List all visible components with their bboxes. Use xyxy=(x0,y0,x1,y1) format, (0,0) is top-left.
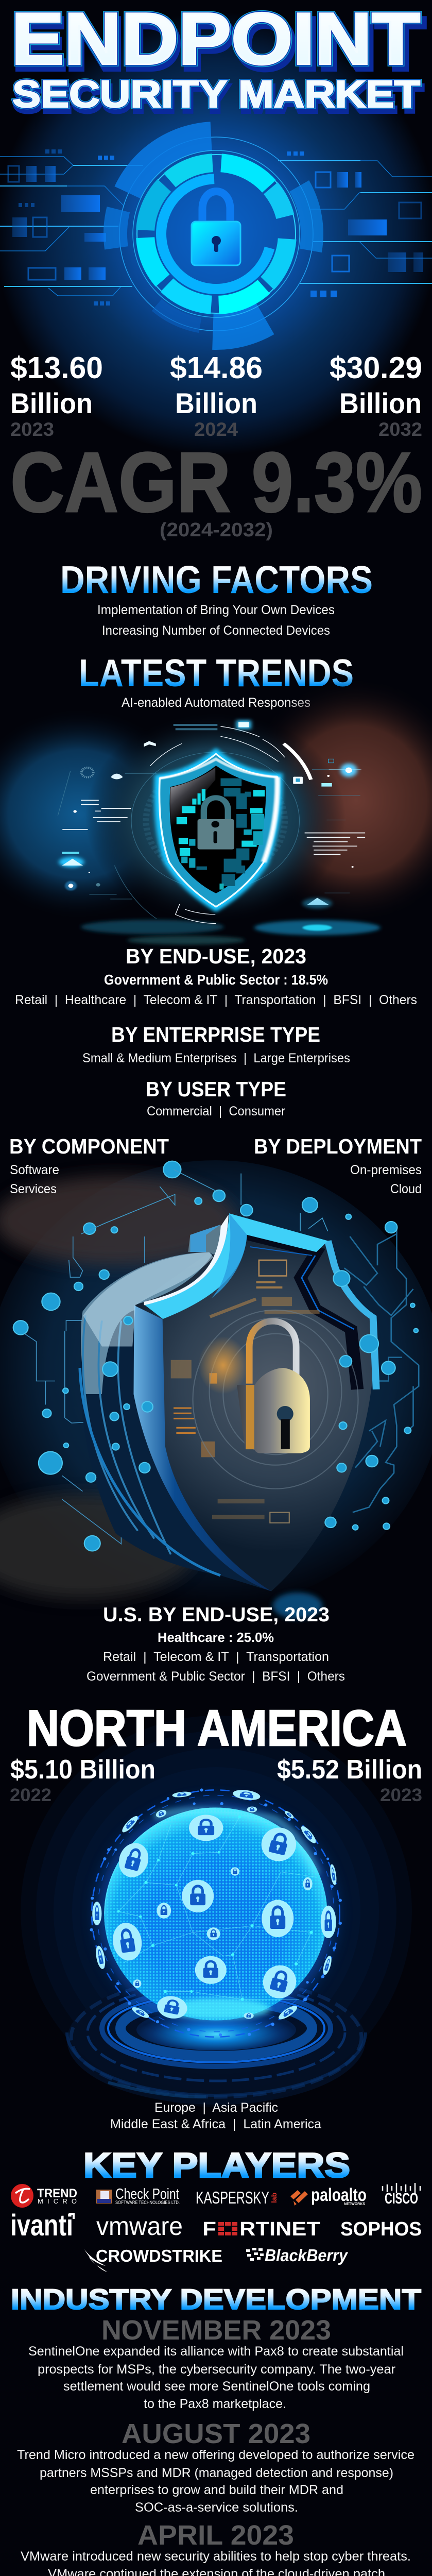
logo: Kaspersky: lab xyxy=(270,2193,278,2203)
north america xyxy=(10,1700,422,1805)
development: April 2023: VMware introduced new security abilities to help stop cyber threats. xyxy=(21,2549,411,2564)
development: April 2023: APRIL 2023 xyxy=(137,2520,294,2551)
key players heading: KEY PLAYERS xyxy=(83,2146,350,2185)
circuit traces xyxy=(344,1229,419,1513)
title: ENDPOINT xyxy=(11,0,420,80)
market size stat 2023 xyxy=(10,351,103,440)
logo: Trend Micro xyxy=(11,2184,77,2208)
latest trends xyxy=(79,651,354,710)
glowing shield illustration xyxy=(0,676,432,945)
by end-use 2023 xyxy=(15,944,417,1007)
development: April 2023 xyxy=(21,2520,411,2576)
small glowing icons xyxy=(59,720,361,908)
by enterprise type: BY ENTERPRISE TYPE xyxy=(111,1023,320,1046)
other regions: Europe | Asia Pacific xyxy=(154,2100,278,2115)
logo: Palo Alto Networks: paloalto xyxy=(311,2185,367,2205)
market size stat 2023: 2023 xyxy=(10,419,54,440)
by component: BY COMPONENT xyxy=(9,1134,169,1158)
north america: 2023 xyxy=(380,1785,422,1805)
north america: $5.52 Billion xyxy=(277,1755,422,1785)
U.S. by end-use: Retail | Telecom & IT | Transportation xyxy=(103,1650,329,1664)
driving factors: Increasing Number of Connected Devices xyxy=(102,623,330,638)
orange glyph details on shield xyxy=(171,1260,320,1523)
U.S. by end-use xyxy=(87,1604,345,1684)
other regions xyxy=(110,2100,321,2131)
by enterprise type: Small & Medium Enterprises | Large Enterprises xyxy=(82,1051,350,1065)
title: SECURITY MARKET xyxy=(14,77,423,120)
development: November 2023: prospects for MSPs, the cybersecurity company. The two-year xyxy=(38,2362,395,2377)
by user type: Commercial | Consumer xyxy=(147,1104,285,1118)
by end-use 2023: Retail | Healthcare | Telecom & IT | Transportation | BFSI | Others xyxy=(15,993,417,1007)
market size stat 2024 xyxy=(170,351,263,440)
development: November 2023: SentinelOne expanded its alliance with Pax8 to create substantial xyxy=(28,2344,404,2359)
market size stat 2024: 2024 xyxy=(194,419,238,440)
globe illustration with locks xyxy=(90,1788,342,2037)
latest trends: AI-enabled Automated Responses xyxy=(122,696,310,710)
U.S. by end-use: U.S. BY END-USE, 2023 xyxy=(103,1604,330,1626)
latest trends: LATEST TRENDS xyxy=(79,651,354,694)
development: August 2023: enterprises to grow and build their MDR and xyxy=(90,2483,343,2497)
title xyxy=(11,0,425,120)
driving factors: Implementation of Bring Your Own Devices xyxy=(97,603,335,617)
logo: Trend Micro: TREND xyxy=(37,2187,77,2200)
title: SECURITY MARKET xyxy=(12,73,420,115)
logo: Cisco xyxy=(383,2183,420,2207)
by deployment: Cloud xyxy=(390,1182,422,1196)
sphere xyxy=(104,1808,327,2021)
logo: CrowdStrike: CROWDSTRIKE xyxy=(96,2246,222,2265)
logo: Palo Alto Networks xyxy=(290,2185,367,2206)
title: ENDPOINT xyxy=(11,0,420,80)
back of shield xyxy=(80,1252,271,1591)
logo: Check Point xyxy=(96,2186,180,2205)
node dots xyxy=(13,1161,418,1551)
development: August 2023 xyxy=(17,2418,414,2515)
logo: Fortinet xyxy=(202,2218,320,2240)
title: ENDPOINT xyxy=(13,3,425,85)
mesh padlock xyxy=(198,798,234,850)
U.S. by end-use: Healthcare : 25.0% xyxy=(158,1630,274,1645)
by deployment: BY DEPLOYMENT xyxy=(254,1134,422,1158)
front of shield xyxy=(135,1213,375,1591)
globe base rings xyxy=(67,1976,366,2105)
logo: Check Point: Check Point xyxy=(115,2186,179,2202)
other regions: Middle East & Africa | Latin America xyxy=(110,2117,321,2131)
logo: Trend Micro: MICRO xyxy=(38,2197,77,2205)
logo: Fortinet: RTINET xyxy=(239,2218,320,2240)
padlock icon xyxy=(192,192,240,265)
outer net xyxy=(92,1790,340,2037)
development: August 2023: Trend Micro introduced a new offering developed to authorize service xyxy=(17,2448,414,2462)
by component xyxy=(9,1134,169,1196)
logo: Palo Alto Networks: NETWORKS xyxy=(344,2202,365,2206)
shield cyan rim xyxy=(83,1213,376,1389)
logo: Sophos: SOPHOS xyxy=(340,2218,422,2240)
development: August 2023: partners MSSPs and MDR (managed detection and response) xyxy=(40,2466,393,2480)
by user type: BY USER TYPE xyxy=(146,1077,286,1101)
by component: Services xyxy=(10,1182,57,1196)
by component: Software xyxy=(10,1163,59,1177)
development: August 2023: SOC-as-a-service solutions. xyxy=(135,2500,298,2515)
logo: Fortinet: F xyxy=(202,2218,216,2240)
dial arcs and circuit lines xyxy=(58,752,360,919)
by user type xyxy=(146,1077,286,1118)
globe halo rings xyxy=(21,1716,412,2107)
U.S. by end-use: Government & Public Sector | BFSI | Others xyxy=(87,1669,345,1684)
by end-use 2023: Government & Public Sector : 18.5% xyxy=(104,972,328,988)
market size stat 2023: Billion xyxy=(10,387,93,419)
by end-use 2023: BY END-USE, 2023 xyxy=(126,944,306,968)
large shield illustration with padlock xyxy=(0,1160,432,1619)
north america: 2022 xyxy=(10,1785,51,1805)
logo: BlackBerry: BlackBerry xyxy=(265,2246,349,2265)
development: November 2023: NOVEMBER 2023 xyxy=(101,2315,331,2346)
market size stat 2024: Billion xyxy=(175,387,257,419)
title: SECURITY MARKET xyxy=(12,73,420,115)
by deployment: On-premises xyxy=(350,1163,422,1177)
logo: Ivanti: ivanti xyxy=(10,2209,73,2242)
padlock xyxy=(198,1336,248,1394)
logo: VMware: vmware xyxy=(96,2212,183,2241)
development: November 2023: settlement would see more SentinelOne tools coming xyxy=(63,2379,370,2394)
white data lines xyxy=(62,800,365,854)
hero illustration: padlock in cyber rings xyxy=(0,12,432,455)
logo: CrowdStrike xyxy=(84,2246,222,2272)
by deployment xyxy=(254,1134,422,1196)
rings and arc segments xyxy=(82,100,350,368)
market size stat 2032: 2032 xyxy=(378,419,422,440)
development: November 2023 xyxy=(28,2315,404,2411)
driving factors: DRIVING FACTORS xyxy=(60,558,373,601)
by enterprise type xyxy=(82,1023,350,1065)
market size stat 2032 xyxy=(330,351,422,440)
title: SECURITY MARKET xyxy=(12,73,420,115)
title: ENDPOINT xyxy=(11,0,420,80)
industry development heading: INDUSTRY DEVELOPMENT xyxy=(11,2283,421,2315)
market size stat 2032: $30.29 xyxy=(330,351,422,385)
logo: Check Point: SOFTWARE TECHNOLOGIES LTD. xyxy=(115,2200,180,2205)
market size stat 2024: $14.86 xyxy=(170,351,263,385)
development: August 2023: AUGUST 2023 xyxy=(122,2418,310,2449)
pixel blocks xyxy=(177,778,265,890)
CAGR callout: (2024-2032) xyxy=(160,519,273,541)
logo: Kaspersky: KASPERSKY xyxy=(196,2188,269,2207)
driving factors xyxy=(60,558,373,638)
shield outline and interior xyxy=(159,754,278,907)
key player logos xyxy=(10,2183,422,2272)
market size stat 2032: Billion xyxy=(339,387,422,419)
lock badges xyxy=(189,1815,223,1841)
north america: $5.10 Billion xyxy=(10,1755,155,1785)
development: November 2023: to the Pax8 marketplace. xyxy=(144,2397,286,2411)
market size stat 2023: $13.60 xyxy=(10,351,103,385)
